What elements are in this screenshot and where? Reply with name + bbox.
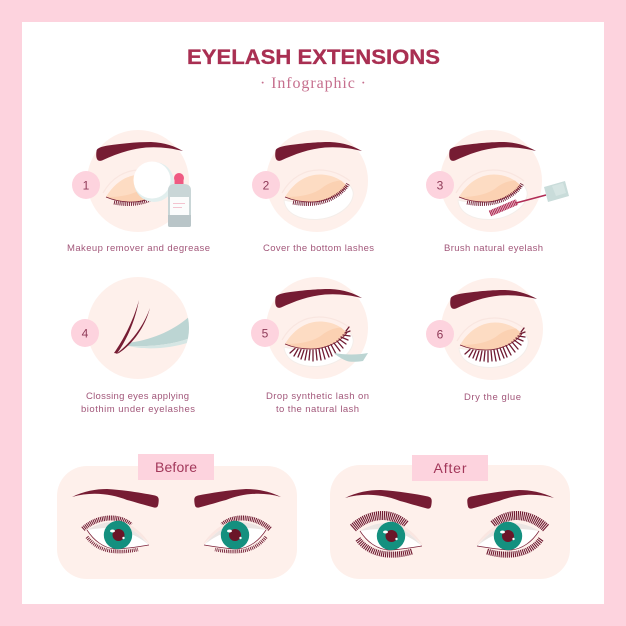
step 4 number badge: 4 <box>82 326 89 340</box>
step 6: dry the glue <box>426 278 543 403</box>
step 2: cover the bottom lashes <box>252 130 374 254</box>
step 2 caption: Cover the bottom lashes <box>263 243 374 254</box>
title: EYELASH EXTENSIONS <box>187 46 440 69</box>
after left eye <box>353 516 423 555</box>
step 3 caption: Brush natural eyelash <box>444 243 543 254</box>
step 1 number badge <box>72 171 100 199</box>
subtitle: · Infographic · <box>260 75 366 92</box>
step 3 number badge <box>426 171 454 199</box>
step 2 eye with pad <box>275 142 362 220</box>
step 1 caption: Makeup remover and degrease <box>67 243 210 254</box>
step 3 eye with pad <box>449 142 536 220</box>
before right eye <box>203 518 270 552</box>
step 4 caption <box>81 391 195 415</box>
step 5 caption: Drop synthetic lash on <box>266 391 369 402</box>
step 6 eye with pad <box>450 290 537 368</box>
step 1: makeup remover <box>67 130 210 254</box>
before eyebrows <box>72 489 281 508</box>
step 5 tweezers <box>334 353 368 362</box>
step 4 caption: Clossing eyes applying <box>86 391 189 402</box>
step 4 caption: biothim under eyelashes <box>81 404 195 415</box>
step 5: drop synthetic lash <box>251 277 369 415</box>
step 3: brush natural eyelash <box>426 130 569 254</box>
remover bottle <box>168 173 191 227</box>
after eyebrows <box>345 490 554 509</box>
after right eye <box>476 516 546 555</box>
step 1 number badge: 1 <box>83 178 90 192</box>
mascara wand <box>490 181 569 214</box>
before tag <box>138 454 214 480</box>
step 5 eye with pad <box>275 289 362 367</box>
step 3 number badge: 3 <box>437 178 444 192</box>
step 5 caption <box>266 391 369 415</box>
step 1 eye <box>96 142 183 204</box>
step 5 number badge: 5 <box>262 326 269 340</box>
step 5 caption: to the natural lash <box>276 404 359 415</box>
after tag <box>412 455 488 481</box>
after tag: After <box>434 460 467 476</box>
tweezers <box>128 316 190 348</box>
step 4: applying biothim <box>71 277 195 415</box>
cotton pad <box>134 162 174 202</box>
panel: after <box>330 455 570 579</box>
panel: before <box>57 454 297 579</box>
step 2 number badge: 2 <box>263 178 270 192</box>
step 6 caption: Dry the glue <box>464 392 521 403</box>
before tag: Before <box>155 459 197 475</box>
before left eye <box>83 518 150 552</box>
lash cluster <box>114 300 150 354</box>
step 6 number badge: 6 <box>437 328 444 342</box>
